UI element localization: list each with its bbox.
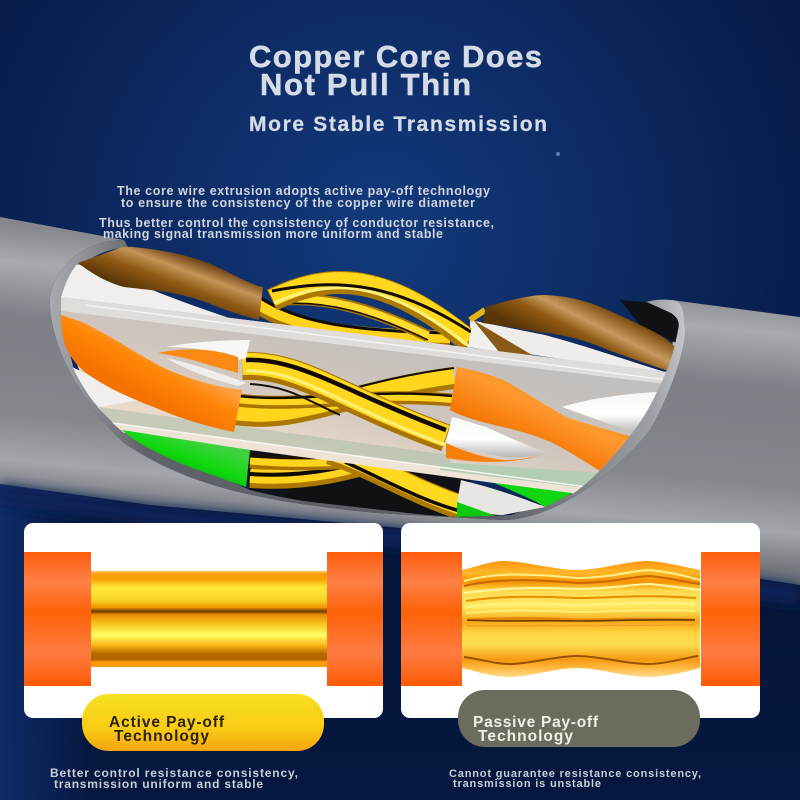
heading xyxy=(249,39,542,102)
active label pill: Active Pay-off xyxy=(109,714,225,731)
caption: active: Better control resistance consistency, xyxy=(50,766,298,780)
heading: Not Pull Thin xyxy=(260,67,471,102)
passive label pill: Passive Pay-off xyxy=(473,714,599,731)
exposed cable interior xyxy=(59,247,680,520)
left orange insulation xyxy=(24,552,91,686)
grey cable jacket xyxy=(0,217,800,585)
brown wire right xyxy=(482,295,675,372)
uneven copper conductor xyxy=(462,561,700,677)
caption: passive xyxy=(449,768,701,790)
brown wire left xyxy=(78,247,263,320)
lower gold pair xyxy=(250,450,460,511)
cable opening rim xyxy=(50,240,685,520)
white wire mid right xyxy=(562,392,659,433)
white wire top left xyxy=(61,264,229,318)
panel: passive pay-off xyxy=(401,523,760,747)
uniform copper conductor xyxy=(91,571,327,667)
white wire mid left xyxy=(73,368,138,407)
left orange insulation xyxy=(401,552,462,686)
orange and white twisted wire xyxy=(158,340,250,386)
brown stripe cut xyxy=(473,320,532,355)
caption: passive: Cannot guarantee resistance consistency, xyxy=(449,768,701,780)
green white wire right xyxy=(457,480,572,517)
description text xyxy=(99,184,494,241)
right orange insulation xyxy=(701,552,760,686)
green wire left xyxy=(122,430,250,487)
caption: passive: transmission is unstable xyxy=(453,778,601,790)
passive label pill: Technology xyxy=(478,728,573,745)
card background xyxy=(401,523,760,718)
description text: Thus better control the consistency of conductor resistance, xyxy=(99,216,494,230)
gold pair middle xyxy=(234,360,454,445)
heading: Copper Core Does xyxy=(249,39,542,74)
subheading: More Stable Transmission xyxy=(249,113,547,136)
caption: active: transmission uniform and stable xyxy=(54,777,263,791)
description text: to ensure the consistency of the copper wire diameter xyxy=(121,196,475,210)
orange wire left xyxy=(59,315,242,432)
description text: making signal transmission more uniform and stable xyxy=(103,227,443,241)
dark cavity xyxy=(240,300,680,520)
active label pill xyxy=(82,694,324,751)
passive label pill xyxy=(458,690,700,747)
gold pair top xyxy=(259,280,485,347)
white wire under right orange xyxy=(446,417,549,457)
strand back xyxy=(259,306,450,340)
partition sheet xyxy=(61,297,667,495)
caption: active xyxy=(50,766,298,791)
panel: active pay-off xyxy=(24,523,383,751)
strand front xyxy=(272,283,470,342)
white wire top right xyxy=(470,320,664,372)
orange tail xyxy=(446,443,541,462)
card background xyxy=(24,523,383,718)
orange wire right xyxy=(450,367,633,472)
description text: The core wire extrusion adopts active pay-off technology xyxy=(117,184,490,198)
right orange insulation xyxy=(327,552,383,686)
active label pill: Technology xyxy=(114,728,209,745)
